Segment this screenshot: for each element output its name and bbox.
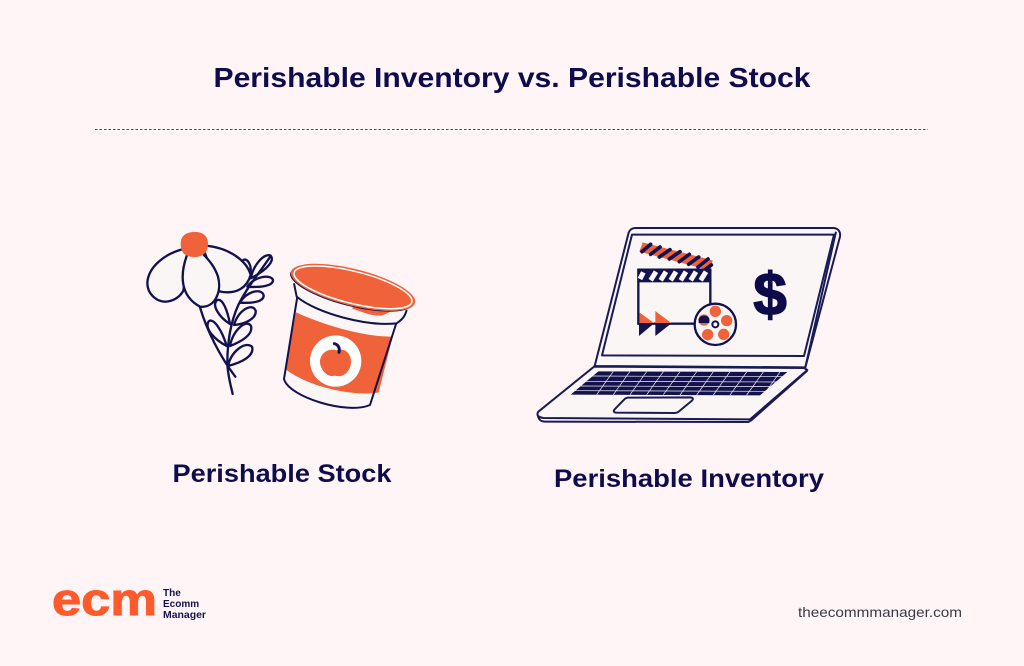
film reel	[695, 304, 736, 345]
apple badge	[310, 335, 361, 387]
logo name: Ecomm	[163, 599, 199, 610]
clapper top	[639, 242, 713, 270]
website url: theecommmanager.com	[798, 604, 962, 620]
logo wordmark: ecm	[52, 574, 157, 625]
cup label	[285, 312, 393, 393]
cup body	[284, 292, 395, 405]
keyboard	[571, 371, 787, 395]
icon: dollar sign: $	[753, 261, 787, 328]
icon: laptop	[537, 228, 840, 422]
title: Perishable Inventory vs. Perishable Stock	[214, 62, 811, 93]
stems	[200, 307, 235, 377]
trackpad	[614, 397, 693, 413]
label: perishable stock: Perishable Stock	[172, 460, 392, 488]
play triangles	[639, 312, 654, 323]
flower petals	[147, 246, 251, 307]
logo name	[163, 588, 206, 621]
logo name: The	[163, 588, 181, 599]
logo: ecm	[52, 574, 206, 625]
cup collar	[294, 283, 407, 324]
lid	[352, 298, 393, 316]
icon: flower sprig	[147, 232, 273, 394]
icon: yogurt cup	[284, 254, 420, 408]
laptop screen	[595, 228, 840, 367]
flower centre	[181, 232, 208, 257]
clapper board	[638, 270, 710, 324]
leaves	[251, 255, 272, 278]
laptop base	[537, 367, 807, 419]
logo name: Manager	[163, 610, 206, 621]
cup outline	[284, 297, 397, 408]
label: perishable inventory: Perishable Inventory	[554, 465, 824, 493]
icon: clapperboard and film reel	[638, 242, 736, 345]
